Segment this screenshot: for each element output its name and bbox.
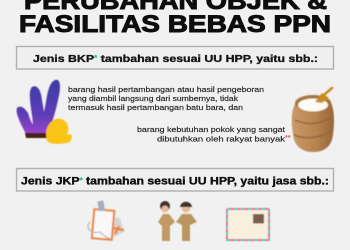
heading box: BKP: tambahan sesuai UU HPP, yaitu sbb.:	[97, 53, 318, 65]
text block: mining goods: yang diambil langsung dari sumbernya, tidak	[68, 94, 238, 103]
text block: mining goods: termasuk hasil pertambangan batu bara, dan	[68, 103, 243, 112]
text block: mining goods	[68, 85, 264, 112]
icon: sack of flour with scoop	[292, 88, 334, 152]
text block: mining goods: barang hasil pertambangan atau hasil pengeboran	[68, 85, 264, 94]
icon: clipboard and stethoscope	[88, 201, 124, 240]
text block: staple goods	[137, 125, 291, 144]
text block: staple goods: **	[285, 135, 291, 142]
icon: airmail envelope	[227, 209, 269, 240]
title	[19, 0, 331, 38]
text block: staple goods: dibutuhkan oleh rakyat banyak	[157, 134, 285, 144]
heading box: BKP: *	[94, 55, 98, 62]
heading box: BKP: Jenis BKP	[33, 53, 85, 65]
title: FASILITAS BEBAS PPN	[19, 11, 331, 38]
heading box: JKP: tambahan sesuai UU HPP, yaitu jasa sbb.:	[83, 176, 329, 188]
heading box: JKP: Jenis JKP	[21, 176, 74, 188]
icon: purple crystal and gold nugget	[17, 80, 72, 144]
heading box: JKP	[16, 168, 334, 191]
text block: staple goods: barang kebutuhan pokok yang sangat	[137, 125, 285, 134]
heading box: JKP: *	[80, 178, 83, 184]
icon: two civil servants	[158, 201, 197, 241]
heading box: BKP	[16, 46, 334, 69]
